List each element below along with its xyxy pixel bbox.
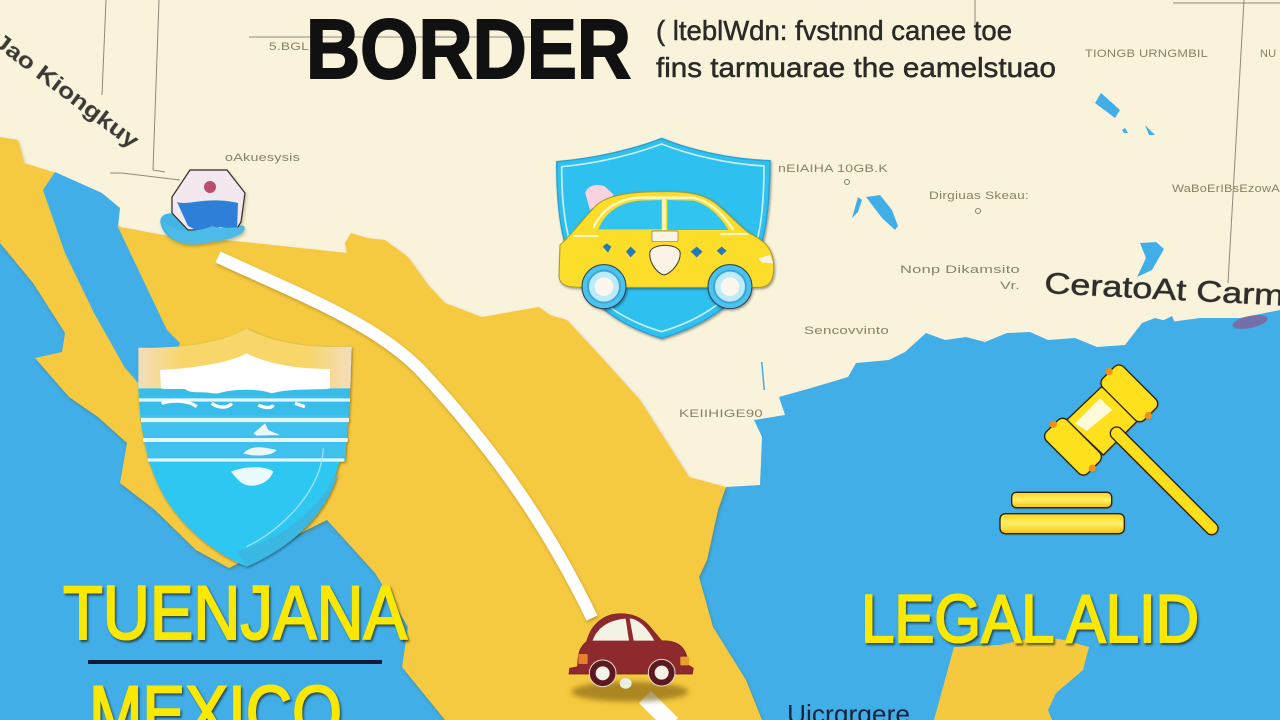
map labels: NU	[1260, 48, 1276, 60]
icon: red car	[569, 614, 693, 702]
icon: car on shield	[557, 138, 774, 338]
gavel barrel	[1067, 387, 1138, 455]
land: Mexico	[0, 137, 762, 720]
map labels: Dirgiuas Skeau:	[929, 190, 1029, 202]
map labels: Nonp Dikamsito	[900, 264, 1020, 276]
divider under Tijuana	[88, 660, 382, 664]
label: Tijuana: TUENJANA	[63, 571, 407, 656]
map labels: oAkuesysis	[225, 152, 300, 164]
map labels	[225, 41, 1280, 420]
icon: water shield	[138, 328, 352, 567]
map labels: 5.BGL	[269, 41, 309, 53]
sound block top	[1012, 492, 1112, 508]
sound block base	[1000, 514, 1124, 534]
map labels: WaBoErIBsEzowA	[1172, 183, 1280, 195]
head corner accents	[1050, 368, 1152, 472]
car body	[569, 614, 693, 674]
barrel highlight	[1075, 398, 1112, 431]
map lines	[102, 0, 1280, 283]
gavel head left	[1042, 416, 1104, 478]
map labels: Vr.	[1000, 280, 1020, 292]
gavel head right	[1098, 362, 1160, 424]
road: lower segment	[645, 697, 672, 720]
map labels: Sencovvinto	[804, 325, 889, 337]
subtitle text block	[656, 15, 1056, 83]
road: white route	[218, 257, 592, 618]
map labels: KEIIHIGE90	[679, 408, 763, 420]
icon: buoy marker	[160, 170, 245, 244]
map labels: TIONGB URNGMBIL	[1085, 48, 1208, 60]
subtitle text block: ( lteblWdn: fvstnnd canee toe	[656, 15, 1012, 46]
icon: gavel	[1000, 362, 1212, 534]
gavel handle	[1117, 433, 1212, 528]
white bumper detail	[620, 678, 632, 689]
lakes	[761, 93, 1178, 390]
label: Legal Aid: LEGAL ALID	[861, 581, 1199, 657]
stain near east coast	[1231, 312, 1269, 332]
handle fill	[1117, 433, 1212, 528]
water: Gulf of California	[43, 172, 180, 385]
subtitle text block: fins tarmuarae the eamelstuao	[656, 52, 1056, 83]
wheels	[582, 265, 752, 309]
land: United States	[0, 0, 1280, 520]
shield behind car	[557, 138, 770, 338]
car body	[559, 192, 774, 309]
map labels: nEIAIHA 10GB.K	[778, 163, 889, 175]
land: Yucatan	[934, 636, 1089, 720]
label: Central Caribbean: CeratoAt Carm	[1044, 267, 1280, 313]
car shadow	[572, 682, 688, 702]
title: BORDER: BORDER	[306, 2, 631, 96]
